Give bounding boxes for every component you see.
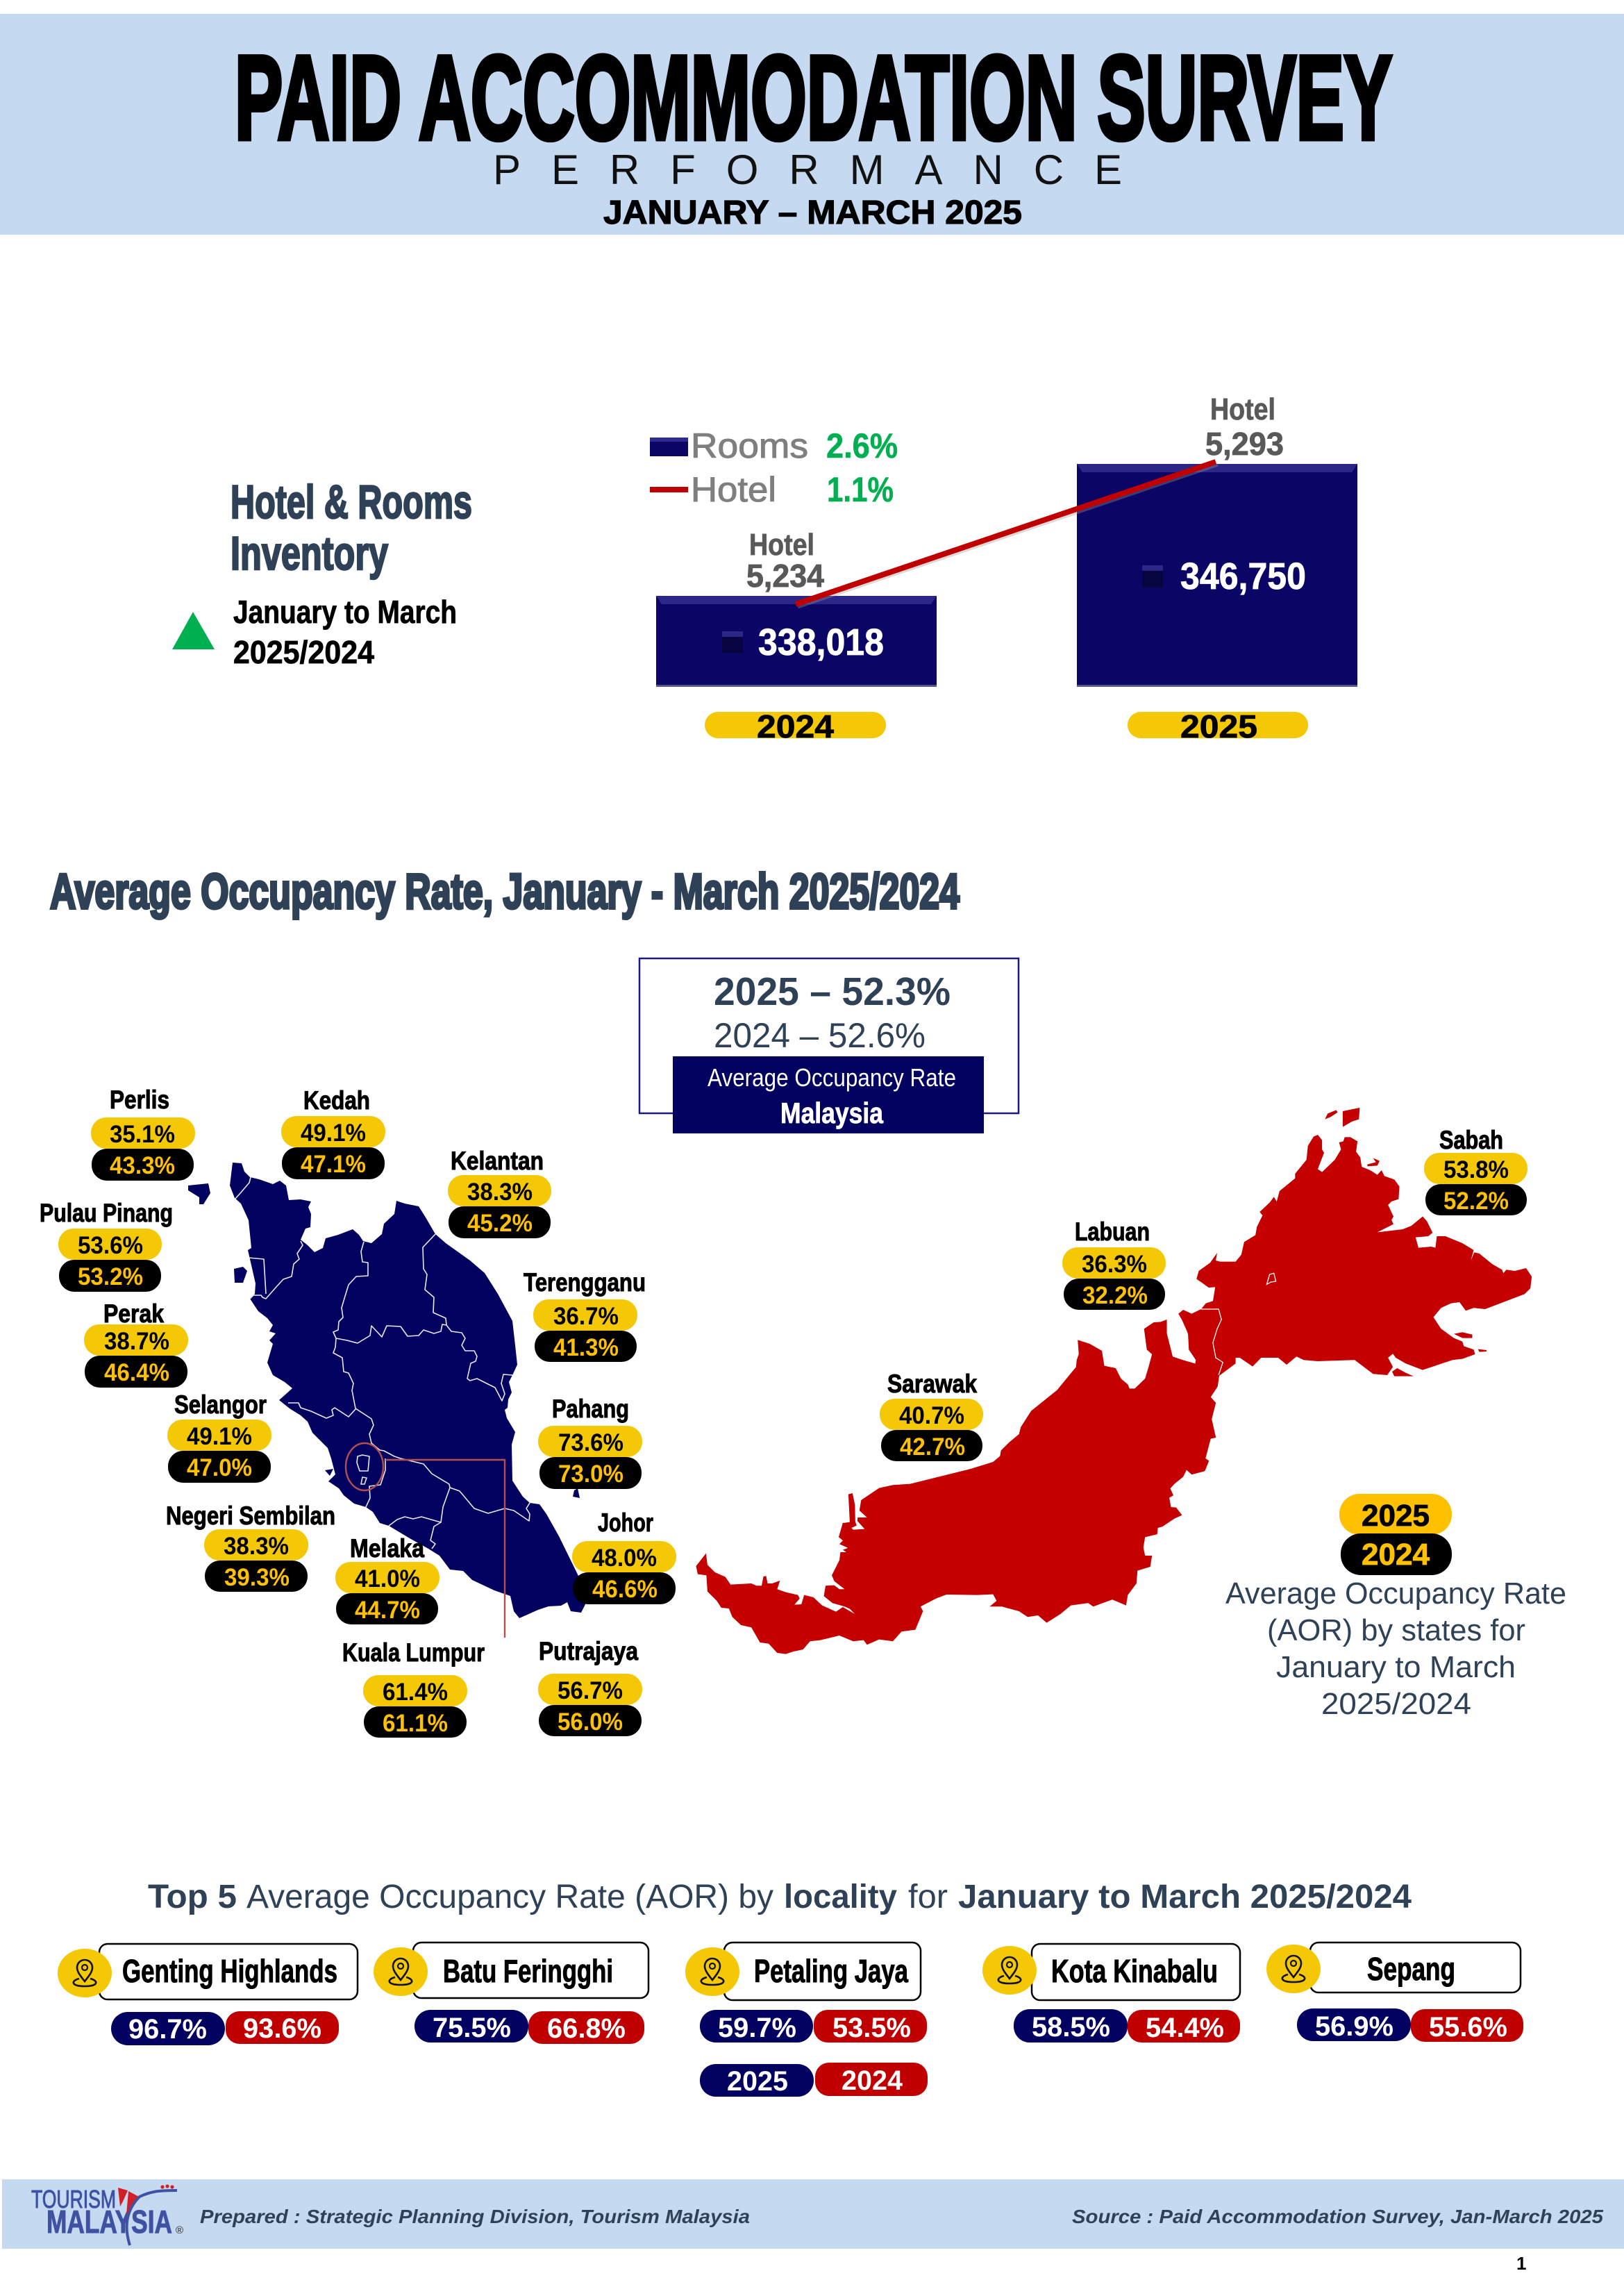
locality: Genting Highlands: Genting Highlands [122,1953,337,1989]
islands [188,1183,580,1498]
state: Pulau Pinang: 53.2% [78,1263,143,1290]
locality: Sepang: Sepang [1367,1951,1455,1987]
state: Putrajaya: Putrajaya [539,1637,638,1665]
state: Negeri Sembilan: 39.3% [224,1564,290,1591]
period: JANUARY – MARCH 2025 [603,194,1022,231]
logo: Tourism Malaysia: ® [176,2224,183,2236]
footer: source: Source : Paid Accommodation Survey, Jan-March 2025 [1072,2206,1603,2227]
state: Melaka: 44.7% [355,1597,420,1624]
map legend: year pills and description: January to March [1276,1650,1516,1684]
locality: Batu Feringghi: Batu Feringghi [443,1953,613,1989]
hotel trend line [796,462,1218,607]
heading: top 5 by locality: for [908,1879,948,1915]
state: Sarawak [880,1370,983,1461]
panel: hotel and rooms inventory heading: January to March [233,594,457,630]
state: Pahang: Pahang [552,1395,629,1423]
locality legend: 2025 and 2024 [700,2063,928,2097]
state: Kedah: Kedah [303,1086,370,1115]
hotel label 2024 [746,528,824,594]
state: Kedah [281,1086,385,1179]
icon: location pin [1266,1945,1321,1993]
locality: Genting Highlands [58,1944,358,2045]
bar 2025 [1077,464,1357,687]
state: Perak [84,1299,188,1388]
state: Terengganu [524,1268,646,1362]
state: Perak: Perak [103,1299,164,1328]
panel: Malaysia average occupancy rate: Average Occupancy Rate [708,1063,956,1092]
icon: location pin [685,1947,739,1996]
locality: Batu Feringghi: 66.8% [547,2013,626,2044]
state: Putrajaya [538,1637,642,1736]
panel: Malaysia average occupancy rate: 2025 – 52.3% [714,970,951,1014]
state: Negeri Sembilan: Negeri Sembilan [166,1501,335,1530]
state: Putrajaya: 56.7% [558,1677,623,1704]
locality: Petaling Jaya [685,1943,927,2043]
state: Perlis: 35.1% [110,1121,175,1148]
footer band [2,2179,1624,2249]
legend: rooms and hotel growth: 2.6% [826,426,898,465]
state: Perak: 46.4% [104,1359,169,1386]
hotel label 2025 [1205,392,1284,462]
state: Selangor: 47.0% [187,1454,252,1481]
state: Kelantan [448,1147,551,1238]
state: Selangor [167,1390,271,1483]
locality legend: 2025 and 2024: 2025 [727,2066,788,2097]
state: Negeri Sembilan [166,1501,335,1592]
hotel label 2025: Hotel [1210,392,1275,426]
heading: top 5 by locality: Top 5 [148,1879,237,1915]
state: Pulau Pinang: 53.6% [78,1232,143,1259]
state: Melaka: Melaka [350,1534,424,1563]
state: Kuala Lumpur: 61.1% [383,1710,448,1737]
state: Kedah: 49.1% [301,1120,366,1147]
locality: Sepang: 55.6% [1429,2012,1507,2043]
panel: hotel and rooms inventory heading: 2025/2024 [233,634,374,670]
state: Johor [572,1508,676,1604]
icon: location pin [982,1946,1037,1995]
year pill 2024 [705,708,886,744]
state: Sarawak: 40.7% [899,1402,964,1429]
legend: rooms and hotel growth [650,426,898,509]
panel: Malaysia average occupancy rate [639,958,1019,1133]
state: Kedah: 47.1% [301,1151,366,1178]
state: Perlis: 43.3% [110,1152,175,1179]
map legend: year pills and description: 2025/2024 [1321,1687,1471,1721]
state: Pulau Pinang: Pulau Pinang [40,1199,173,1227]
heading: top 5 by locality [148,1879,1412,1915]
map legend: year pills and description: (AOR) by states for [1267,1613,1525,1647]
bar 2025: 346,750 [1180,556,1306,597]
state: Putrajaya: 56.0% [558,1708,623,1736]
map: Sarawak [696,1320,1223,1654]
state: Johor: 46.6% [592,1576,658,1603]
icon: location pin [374,1947,428,1996]
state: Terengganu: 41.3% [553,1334,619,1361]
state: Johor: Johor [598,1508,653,1537]
state: Sabah [1424,1126,1527,1215]
state: Selangor: 49.1% [187,1423,252,1450]
locality: Kota Kinabalu [982,1944,1240,2043]
panel: hotel and rooms inventory heading: Inventory [231,527,388,580]
state: Sarawak: Sarawak [887,1370,977,1398]
hotel label 2024: 5,234 [746,558,824,594]
state: Kuala Lumpur [342,1638,485,1738]
hotel label 2025: 5,293 [1205,426,1284,462]
hotel label 2024: Hotel [749,528,814,562]
map legend: year pills and description: 2025 [1362,1499,1430,1533]
heading: top 5 by locality: Average Occupancy Rate (AOR) by [246,1879,773,1915]
state: Labuan: Labuan [1075,1217,1150,1246]
state: Kelantan: 38.3% [467,1179,533,1206]
header band [0,14,1624,235]
locality: Genting Highlands: 96.7% [128,2014,207,2045]
state: Labuan: 32.2% [1082,1282,1148,1309]
state: Negeri Sembilan: 38.3% [224,1533,289,1560]
panel: hotel and rooms inventory heading: Hotel & Rooms [231,476,472,529]
map legend: year pills and description [1225,1494,1566,1721]
panel: Malaysia average occupancy rate: Malaysia [780,1097,884,1129]
state: Pahang: 73.0% [558,1461,623,1488]
map legend: year pills and description: 2024 [1362,1538,1430,1572]
locality: Batu Feringghi [374,1943,648,2044]
legend: rooms and hotel growth: Hotel [691,470,776,509]
state: Sabah: Sabah [1439,1126,1503,1154]
state: Perlis: Perlis [110,1085,169,1114]
locality legend: 2025 and 2024: 2024 [842,2065,903,2096]
map: Sabah [1178,1108,1532,1389]
state: Perak: 38.7% [104,1328,169,1355]
state: Pahang [538,1395,642,1489]
year pill 2025: 2025 [1180,708,1257,744]
state: Kuala Lumpur: Kuala Lumpur [342,1638,485,1667]
icon: green up triangle [172,612,215,649]
state: Terengganu: 36.7% [553,1303,619,1330]
heading: top 5 by locality: locality [784,1879,897,1915]
year pill 2025 [1128,708,1308,744]
state: Pahang: 73.6% [558,1429,623,1456]
subtitle: PERFORMANCE [493,147,1122,193]
icon: location pin [58,1949,112,1997]
bar 2024 [656,596,937,687]
locality: Kota Kinabalu: 54.4% [1146,2013,1224,2043]
state: Labuan [1062,1217,1166,1310]
locality: Petaling Jaya: 59.7% [718,2013,796,2043]
state: Terengganu: Terengganu [524,1268,646,1297]
legend: rooms and hotel growth: Rooms [691,426,808,465]
state: Melaka: 41.0% [355,1565,420,1592]
locality: Sepang: 56.9% [1315,2011,1393,2042]
state: Kuala Lumpur: 61.4% [383,1679,448,1706]
locality: Petaling Jaya: 53.5% [832,2013,911,2043]
panel: hotel and rooms inventory heading [231,476,472,670]
locality: Kota Kinabalu: Kota Kinabalu [1051,1953,1218,1989]
locality: Kota Kinabalu: 58.5% [1032,2012,1110,2043]
heading: average occupancy rate: Average Occupancy Rate, January - March 2025/2024 [50,865,960,920]
state: Sabah: 52.2% [1443,1188,1509,1215]
state: Labuan: 36.3% [1082,1251,1147,1278]
state: Sarawak: 42.7% [900,1433,965,1461]
state: Melaka [335,1534,440,1624]
heading: top 5 by locality: January to March 2025/2024 [958,1879,1412,1915]
map legend: year pills and description: Average Occupancy Rate [1225,1577,1566,1611]
locality: Genting Highlands: 93.6% [243,2013,321,2044]
logo: Tourism Malaysia: MALAYSIA [47,2204,172,2240]
bar 2024: 338,018 [758,622,884,663]
locality: Sepang [1266,1943,1523,2043]
legend: rooms and hotel growth: 1.1% [827,470,894,509]
state: Sabah: 53.8% [1443,1156,1509,1183]
logo: Tourism Malaysia: TOURISM [31,2185,116,2213]
year pill 2024: 2024 [757,708,834,744]
state: Selangor: Selangor [174,1390,267,1419]
state: Kelantan: 45.2% [467,1210,533,1237]
map: peninsular Malaysia [188,1163,585,1638]
locality: Petaling Jaya: Petaling Jaya [754,1953,908,1989]
state: Pulau Pinang [40,1199,173,1292]
bar chart: rooms inventory [656,392,1357,744]
panel: Malaysia average occupancy rate: 2024 – 52.6% [714,1016,926,1055]
footer: prepared by: Prepared : Strategic Planning Division, Tourism Malaysia [200,2206,750,2227]
locality: Batu Feringghi: 75.5% [433,2013,511,2043]
state: Perlis [91,1085,195,1181]
logo: Tourism Malaysia [31,2184,183,2245]
KL and Putrajaya callout circle [346,1443,505,1638]
state: Kelantan: Kelantan [451,1147,544,1175]
state: Johor: 48.0% [592,1545,657,1572]
page number: 1 [1516,2253,1526,2274]
